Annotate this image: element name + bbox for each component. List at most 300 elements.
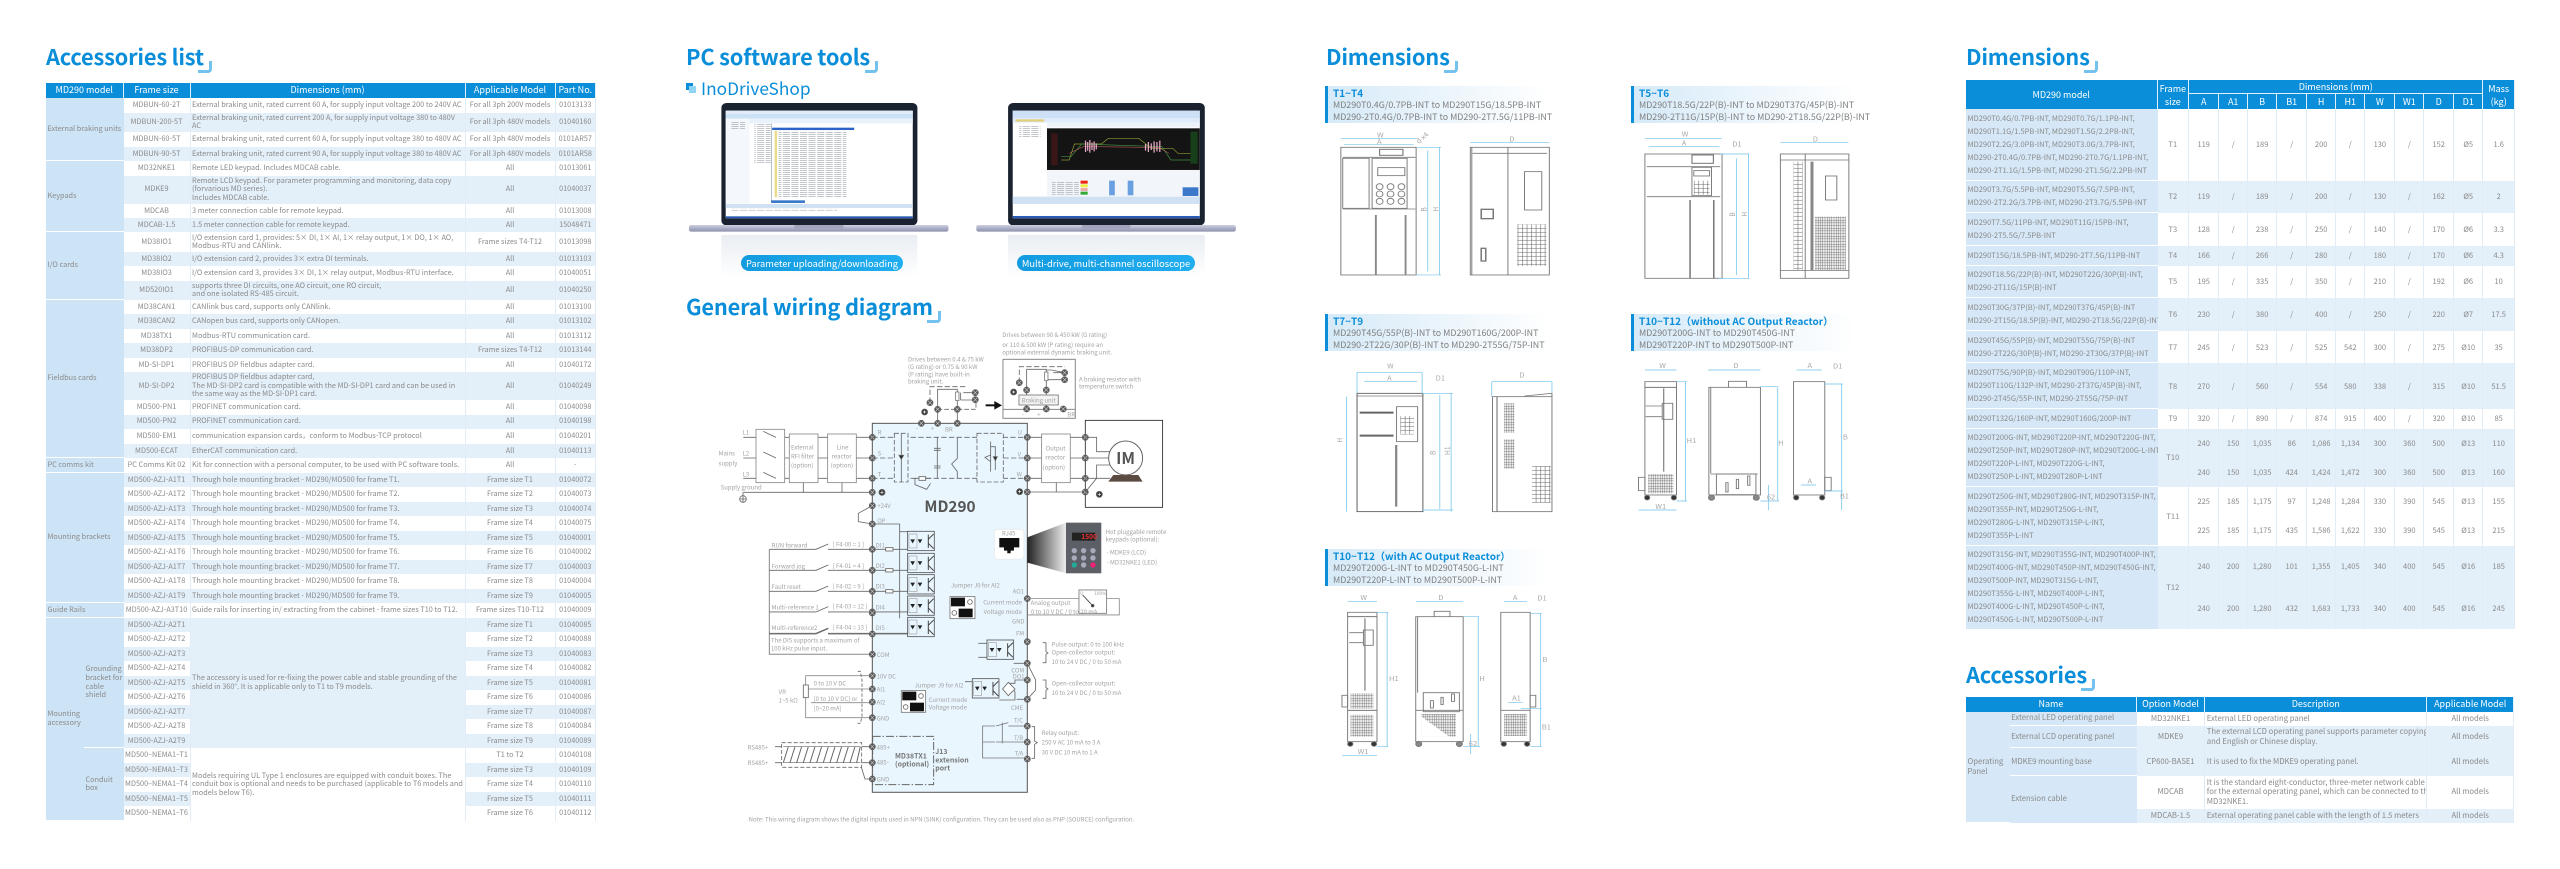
drawing: T10~T12 with reactor: A1 [1512,694,1521,703]
table: dimensions: MD290T400G-L-INT, MD290T450P-L-INT, [1968,601,2105,612]
table: dimensions: 225 [2197,496,2210,507]
table: dimensions: / [2290,224,2293,235]
table: accessories list: Guide Rails [48,605,85,615]
table: dimensions: 210 [2374,276,2386,287]
table: dimensions: 170 [2432,224,2445,235]
table: accessories list: Frame size T6 [487,692,533,702]
table: dimensions: MD290T1.1G/1.5PB-INT, MD290T1.5G/2.2PB-INT, [1968,126,2135,137]
table: dimensions: Ø6 [2463,224,2473,235]
table: accessories list: Frame size T3 [487,765,533,775]
table: dimensions: 340 [2374,561,2386,572]
table: accessories list: 3 meter connection cable for remote keypad. [192,206,344,216]
wiring diagram: Open-collector output: [1052,648,1116,657]
wiring diagram: 250 V AC 10 mA to 3 A [1042,738,1101,747]
heading: T10~T12 without reactor: MD290T220P-INT to MD290T500P-INT [1639,338,1793,351]
wiring diagram: RS485+ [748,758,769,767]
table: accessories list: Remote LCD keypad. For parameter programming and monitoring, data copy [192,176,451,186]
wiring diagram: A braking resistor with [1079,374,1141,383]
table: dimensions: 240 [2197,603,2210,614]
wiring diagram: MD38TX1 [895,752,927,762]
wiring diagram: [ F4-04 = 13 ] [833,623,867,632]
table: accessories list: CANlink bus card, supports only CANlink. [192,302,331,312]
table: dimensions: D1 [2463,95,2474,108]
table: dimensions: 185 [2492,561,2505,572]
wiring diagram: BR [945,424,953,433]
table: dimensions: MD290T315G-INT, MD290T355G-INT, MD290T400P-INT, [1968,549,2156,560]
table: dimensions: / [2349,224,2352,235]
table: accessories list: External braking unit, rated current 90 A, for supply input voltage 380 to 480V AC [192,149,462,159]
table: dimensions: 1,248 [2312,496,2331,507]
drawing: T10~T12 without reactor: A [1807,477,1813,486]
table: accessories list: MD500–NEMA1–T1 [125,750,188,760]
table: dimensions: MD290T75G/90P(B)-INT, MD290T90G/110P-INT, [1968,367,2130,378]
wiring diagram: 485+ [877,742,891,751]
table: accessories list: 01040110 [559,779,591,789]
table: accessories: MD32NKE1. [2207,796,2248,807]
table: accessories list: 01040037 [559,184,591,194]
table: dimensions: 1,424 [2312,467,2331,478]
wiring diagram: supply [719,458,738,467]
table: accessories list: Frame size T4 [487,663,533,673]
table: accessories list: For all 3ph 480V models [470,117,550,127]
heading: T10~T12 without reactor: MD290T200G-INT to MD290T450G-INT [1639,326,1795,339]
table: dimensions: / [2408,309,2411,320]
table: accessories list: MDCAB [144,206,169,216]
table: accessories: The external LCD operating panel supports parameter copying [2207,726,2427,737]
table: dimensions: 390 [2403,496,2416,507]
wiring diagram: IM [1116,445,1135,469]
wiring diagram: 10 to 24 V DC / 0 to 50 mA [1052,657,1122,666]
table: dimensions: 230 [2197,309,2210,320]
table: accessories list: MD500–NEMA1–T6 [125,808,188,818]
wiring diagram: T [878,470,882,479]
table: dimensions: 86 [2288,438,2296,449]
subheading: InoDriveShop: InoDriveShop [701,75,811,100]
drawing: T5~T6: D1 [1732,140,1742,149]
heading: T5~T6: MD290-2T11G/15P(B)-INT to MD290-2T18.5G/22P(B)-INT [1639,110,1870,123]
table: dimensions: T11 [2166,511,2179,522]
table: accessories list: 01040074 [559,504,591,514]
table: accessories list: All [506,302,514,312]
wiring diagram: Multi-reference2 [772,623,818,632]
table: dimensions: 162 [2432,191,2445,202]
table: dimensions: 320 [2197,413,2210,424]
table: accessories list: Through hole mounting bracket - MD290/MD500 for frame T7. [192,562,399,572]
drawing: T10~T12 with reactor: H1 [1389,674,1399,684]
table: accessories list: MDCAB-1.5 [138,220,175,230]
table: dimensions: 560 [2256,381,2268,392]
table: dimensions: Ø16 [2461,603,2475,614]
table: dimensions: 340 [2374,603,2386,614]
table: accessories list: Includes MDCAB cable. [192,193,269,203]
wiring diagram: 0 to 10 V DC / 0 to 20 mA [1031,607,1098,616]
heading: T7~T9: MD290T45G/55P(B)-INT to MD290T160G/200P-INT [1333,326,1538,339]
table: accessories list: 01040005 [559,591,591,601]
table: dimensions: 51.5 [2491,381,2506,392]
table: accessories list: 01040198 [559,416,591,426]
wiring diagram: RUN forward [772,540,808,549]
wiring diagram: optional external dynamic braking unit. [1002,347,1112,356]
table: dimensions: 300 [2374,342,2386,353]
table: dimensions: 400 [2403,603,2416,614]
table: accessories list: Frame size T2 [487,489,533,499]
table: dimensions: MD290-2T1.1G/1.5PB-INT, MD290-2T1.5G/2.2PB-INT [1968,165,2147,176]
wiring diagram: (option) [791,461,813,470]
table: dimensions: H1 [2344,95,2356,108]
table: accessories list: PC Comms Kit 02 [128,460,185,470]
table: dimensions: 1,355 [2312,561,2331,572]
table: accessories list: Part No. [558,83,592,96]
table: accessories list: All [506,254,514,264]
table: accessories list [46,83,596,821]
table: dimensions: 525 [2315,342,2327,353]
table: accessories list: The MD-SI-DP2 card is compatible with the MD-SI-DP1 card and can be used in [192,381,455,391]
drawing: T10~T12 without reactor: W1 [1655,502,1666,512]
table: dimensions: 215 [2492,525,2505,536]
drawing: T10~T12 with reactor: A [1513,593,1518,603]
table: accessories list: 01040172 [559,360,591,370]
table: dimensions: MD290-2T0.4G/0.7PB-INT, MD290-2T0.7G/1.1PB-INT, [1968,152,2148,163]
table: accessories list: All [506,206,514,216]
table: dimensions: 97 [2288,496,2296,507]
wiring diagram: L1 [743,428,749,437]
table: dimensions: 245 [2197,342,2210,353]
table: accessories list: 01040081 [559,678,591,688]
table: accessories: External operating panel cable with the length of 1.5 meters [2207,810,2419,821]
table: accessories list: 01013102 [559,316,591,326]
wiring diagram: External [791,442,814,451]
table: accessories list: 01040002 [559,547,591,557]
table: dimensions: 160 [2492,467,2505,478]
heading: T10~T12 with reactor [1325,549,1550,586]
drawing: T10~T12 with reactor: W [1360,593,1368,603]
wiring diagram: temperature switch [1079,382,1134,391]
table: dimensions: 1.6 [2493,139,2504,150]
wiring diagram: Jumper J9 for AI2 [915,680,964,689]
drawing: T1~T4: d x4 [1414,130,1431,146]
table: accessories list: Modbus-RTU communication card. [192,331,310,341]
wiring diagram: L3 [743,469,749,478]
wiring diagram: Forward jog [772,561,806,570]
table: dimensions: 1,280 [2253,561,2272,572]
table: dimensions: Ø6 [2463,250,2473,261]
table: dimensions: H [2318,95,2324,108]
table: dimensions: Ø6 [2463,276,2473,287]
drawing: T10~T12 with reactor: B [1543,655,1548,665]
table: dimensions: 1,086 [2312,438,2331,449]
heading: T5~T6: MD290T18.5G/22P(B)-INT to MD290T37G/45P(B)-INT [1639,98,1854,111]
table: accessories list: 01013144 [559,345,591,355]
table: accessories list: MD38IO1 [141,237,172,247]
table: dimensions: MD290T400G-INT, MD290T450P-INT, MD290T450G-INT, [1968,562,2156,573]
table: accessories list: I/O extension card 3, provides 3× DI, 1× relay output, Modbus-RTU interface. [192,268,454,278]
wiring diagram: Drives between 90 & 450 kW (G rating) [1002,330,1107,339]
wiring diagram: Braking unit [1022,395,1056,404]
table: dimensions: 225 [2197,525,2210,536]
wiring diagram: T/A [1015,749,1024,758]
table: accessories list: - [574,460,577,470]
table: accessories list: The accessory is used for re-fixing the power cable and stable grounding of the [192,673,457,683]
heading: T7~T9 [1325,314,1550,351]
table: accessories: and English or Chinese display. [2207,736,2317,747]
laptop: parameter screen [689,103,948,277]
table: accessories: All models [2452,810,2489,821]
table: dimensions: 335 [2256,276,2268,287]
table: dimensions: W1 [2403,95,2416,108]
table: dimensions: MD290-2T45G/55P-INT, MD290-2T55G/75P-INT [1968,393,2128,404]
table: accessories list: MD500-AZJ-A2T7 [128,707,185,717]
wiring diagram: [ F4-03 = 12 ] [833,602,867,611]
table: accessories: It is used to fix the MDKE9 operating panel. [2207,756,2359,767]
table: dimensions: T9 [2169,413,2177,424]
table: dimensions: MD290T220P-L-INT, MD290T220G-L-INT, [1968,458,2105,469]
table: accessories list: 01013112 [559,331,591,341]
wiring diagram: 100 kHz pulse input. [771,644,828,653]
table: dimensions: 400 [2374,413,2386,424]
table: accessories list: Through hole mounting bracket - MD290/MD500 for frame T5. [192,533,399,543]
table: accessories list: MD38CAN1 [138,302,175,312]
wiring diagram: MD290 [924,495,976,517]
table: accessories list: Models requiring UL Type 1 enclosures are equipped with conduit boxes. The [192,771,451,781]
table: accessories list: shield [86,690,106,700]
table: accessories: MDCAB-1.5 [2151,810,2190,821]
table: dimensions: MD290T355P-INT, MD290T250G-L-INT, [1968,504,2098,515]
table: dimensions: T1 [2169,139,2177,150]
wiring diagram: 1500 [1081,531,1097,541]
wiring diagram: RFI filter [791,452,815,461]
table: accessories list: I/O extension card 2, provides 3× extra DI terminals. [192,254,369,264]
table: dimensions: 400 [2403,561,2416,572]
wiring diagram: Pulse output: 0 to 100 kHz [1052,640,1124,649]
drawing: T1~T4: H [1431,207,1441,212]
table: dimensions: Mass [2488,82,2509,95]
table: dimensions: MD290T132G/160P-INT, MD290T160G/200P-INT [1968,413,2131,424]
table: dimensions: MD290T200G-INT, MD290T220P-INT, MD290T220G-INT, [1968,432,2156,443]
table: dimensions: 890 [2256,413,2268,424]
table: dimensions: Ø7 [2463,309,2473,320]
table: dimensions: 240 [2197,561,2210,572]
table: accessories list: Frame size [134,83,179,96]
table: accessories: for the external operating panel, which can be connected to the [2207,786,2427,797]
drawing: T1~T4: B [1419,207,1430,212]
table: accessories list: All [506,446,514,456]
drawing: T10~T12 with reactor: 62 [1469,739,1477,749]
table: dimensions: / [2290,139,2293,150]
wiring diagram: 10V DC [877,671,896,680]
wiring diagram: RJ45 [1002,529,1015,538]
table: accessories list: and one isolated RS-485 circuit. [192,289,299,299]
table: accessories list: 01040108 [559,750,591,760]
table: accessories list: PROFINET communication card. [192,416,301,426]
wiring diagram: Analog output [1031,598,1071,607]
table: accessories list: Kit for connection with a personal computer, to be used with PC software tools. [192,460,459,470]
table: dimensions: 166 [2197,250,2210,261]
table: accessories list: PROFIBUS-DP communication card. [192,345,313,355]
table: dimensions: 35 [2494,342,2503,353]
table: dimensions: T4 [2169,250,2177,261]
table: accessories list: External braking unit, rated current 200 A, for supply input voltage 380 to 480V [192,113,455,123]
table: accessories list: MDBUN-60-2T [133,100,180,110]
table: dimensions: / [2349,191,2352,202]
wiring diagram [719,330,1167,823]
table: accessories list: 01040085 [559,620,591,630]
table: accessories list: MD38IO2 [141,254,172,264]
table: dimensions: / [2408,276,2411,287]
table: accessories list: 01013100 [559,302,591,312]
drawing: T10~T12 without reactor: H [1778,439,1784,448]
table: accessories list: Fieldbus cards [48,373,97,383]
table: accessories list: 01013098 [559,237,591,247]
table: accessories list: Frame size T8 [487,721,533,731]
table: dimensions: MD290-2T2.2G/3.7PB-INT, MD290-2T3.7G/5.5PB-INT [1968,197,2147,208]
table: accessories list: MD500-AZJ-A3T10 [126,605,187,615]
table: accessories list: MD500-AZJ-A1T1 [128,475,185,485]
table: dimensions: 380 [2256,309,2268,320]
table: dimensions: 180 [2374,250,2386,261]
table: accessories list: MD500-AZJ-A1T7 [128,562,185,572]
table: dimensions: 1,622 [2341,525,2360,536]
table: dimensions: MD290T18.5G/22P(B)-INT, MD290T22G/30P(B)-INT, [1968,269,2143,280]
table: accessories list: MD500-PN2 [137,416,176,426]
drawing: T5~T6 [1645,130,1849,278]
table: dimensions: Ø10 [2461,413,2475,424]
table: accessories list: MD290 model [56,83,113,96]
table: accessories list: MD500-AZJ-A2T8 [128,721,185,731]
table: accessories list: 01013061 [559,163,591,173]
table: accessories list: 01040051 [559,268,591,278]
table: dimensions: 1,733 [2341,603,2360,614]
table: accessories: All models [2452,756,2489,767]
wiring diagram: 0 [1080,591,1083,597]
drawing: T7~T9: B [1428,450,1439,455]
table: accessories list: MD38CAN2 [138,316,175,326]
table: dimensions: B1 [2286,95,2297,108]
drawing: T7~T9: A [1387,374,1392,383]
table: dimensions: T12 [2166,582,2179,593]
table: dimensions: MD290T500P-INT, MD290T315G-L-INT, [1968,575,2098,586]
drawing: T7~T9: D1 [1436,374,1445,383]
table: dimensions: 200 [2227,561,2239,572]
table: accessories list: Keypads [48,191,76,201]
table: accessories list: All [506,381,514,391]
table: dimensions: 545 [2432,496,2445,507]
table: accessories list: Dimensions (mm) [290,83,365,96]
wiring diagram: 100% [1094,591,1107,597]
wiring diagram: L2 [743,449,750,458]
table: accessories list: All [506,268,514,278]
wiring diagram: DI3 [876,582,885,591]
table: accessories list: 01013008 [559,206,591,216]
table: accessories list: CANopen bus card, supports only CANopen. [192,316,340,326]
table: dimensions: 1,175 [2253,496,2272,507]
drawing: T10~T12 with reactor: B1 [1542,723,1551,732]
table: dimensions: 189 [2256,139,2268,150]
table: accessories list: MD500–NEMA1–T4 [125,779,188,789]
table: accessories list: Frame size T7 [487,707,533,717]
table: dimensions: 1,035 [2253,438,2272,449]
table: accessories list: 01040086 [559,692,591,702]
table: dimensions: / [2349,276,2352,287]
table: dimensions: MD290T30G/37P(B)-INT, MD290T37G/45P(B)-INT [1968,302,2135,313]
table: accessories list: MD500-AZJ-A1T5 [128,533,185,543]
table: accessories list: MD500-AZJ-A1T2 [128,489,185,499]
table: accessories list: MD500-AZJ-A2T5 [128,678,185,688]
table: accessories list: Frame size T3 [487,649,533,659]
wiring diagram: keypads (optional): [1106,534,1160,543]
table: dimensions: 130 [2374,191,2386,202]
table: accessories list: MD500-AZJ-A2T4 [128,663,185,673]
drawing: T5~T6: W [1682,130,1689,139]
table: dimensions: 915 [2344,413,2356,424]
drawing: T10~T12 with reactor: D [1438,593,1444,603]
table: dimensions: 189 [2256,191,2268,202]
table: dimensions: Ø13 [2461,467,2475,478]
wiring diagram: 485- [877,758,889,767]
wiring diagram: AI1 [877,685,885,694]
wiring diagram: Supply ground [721,483,762,492]
table: dimensions: MD290T45G/55P(B)-INT, MD290T55G/75P(B)-INT [1968,335,2135,346]
drawing: T5~T6: H [1740,212,1750,217]
table: dimensions: 220 [2432,309,2445,320]
table: accessories list: 0101AR58 [559,149,592,159]
table: accessories list: (forvarious MD series). [192,184,268,194]
table: dimensions: 1,405 [2341,561,2360,572]
table: dimensions: 130 [2374,139,2386,150]
wiring diagram: W [1017,470,1023,479]
table: accessories list: MD500-PN1 [137,402,176,412]
table: dimensions: MD290T250P-INT, MD290T280P-INT, MD290T200G-L-INT, [1968,445,2158,456]
table: accessories list: 01013103 [559,254,591,264]
wiring diagram: reactor [832,452,852,461]
table: dimensions: 250 [2315,224,2327,235]
table: accessories list: Frame size T2 [487,634,533,644]
table: dimensions: / [2232,139,2235,150]
table: accessories list: models below T6). [192,788,254,798]
table: dimensions: MD290T0.4G/0.7PB-INT, MD290T0.7G/1.1PB-INT, [1968,113,2135,124]
table: accessories: All models [2452,713,2489,724]
wiring diagram: AO1 [1013,586,1024,595]
table: accessories list: 01040087 [559,707,591,717]
wiring diagram: 10 to 24 V DC / 0 to 50 mA [1052,688,1122,697]
wiring diagram: V [1018,449,1022,458]
drawing: T10~T12 without reactor: B1 [1840,492,1849,501]
wiring diagram: Output [1046,444,1066,453]
wiring diagram: R [878,428,882,437]
table: accessories list: PC comms kit [48,460,94,470]
table: accessories list: 01040001 [559,533,591,543]
table: accessories: MDKE9 [2158,731,2183,742]
table: accessories list: All [506,184,514,194]
table: accessories list: Through hole mounting bracket - MD290/MD500 for frame T4. [192,518,399,528]
drawing: T7~T9 [1335,362,1552,512]
table: accessories list: MD500–NEMA1–T3 [125,765,188,775]
table: accessories: MDCAB [2157,786,2184,797]
heading: T7~T9: T7~T9 [1333,313,1363,328]
laptop: oscilloscope screen [976,103,1236,277]
table: dimensions: 315 [2432,381,2445,392]
drawing: T1~T4: A [1377,137,1382,147]
table: accessories list: 1.5 meter connection cable for remote keypad. [192,220,350,230]
table: dimensions: 128 [2197,224,2210,235]
wiring diagram: Current mode [983,597,1023,606]
table: dimensions: / [2290,309,2293,320]
table: dimensions: 1,472 [2341,467,2360,478]
table: dimensions: 330 [2374,496,2386,507]
table: dimensions: 400 [2315,309,2327,320]
table: dimensions: size [2165,95,2181,108]
drawing: T1~T4: W [1377,131,1384,140]
wiring diagram: - [916,424,918,433]
